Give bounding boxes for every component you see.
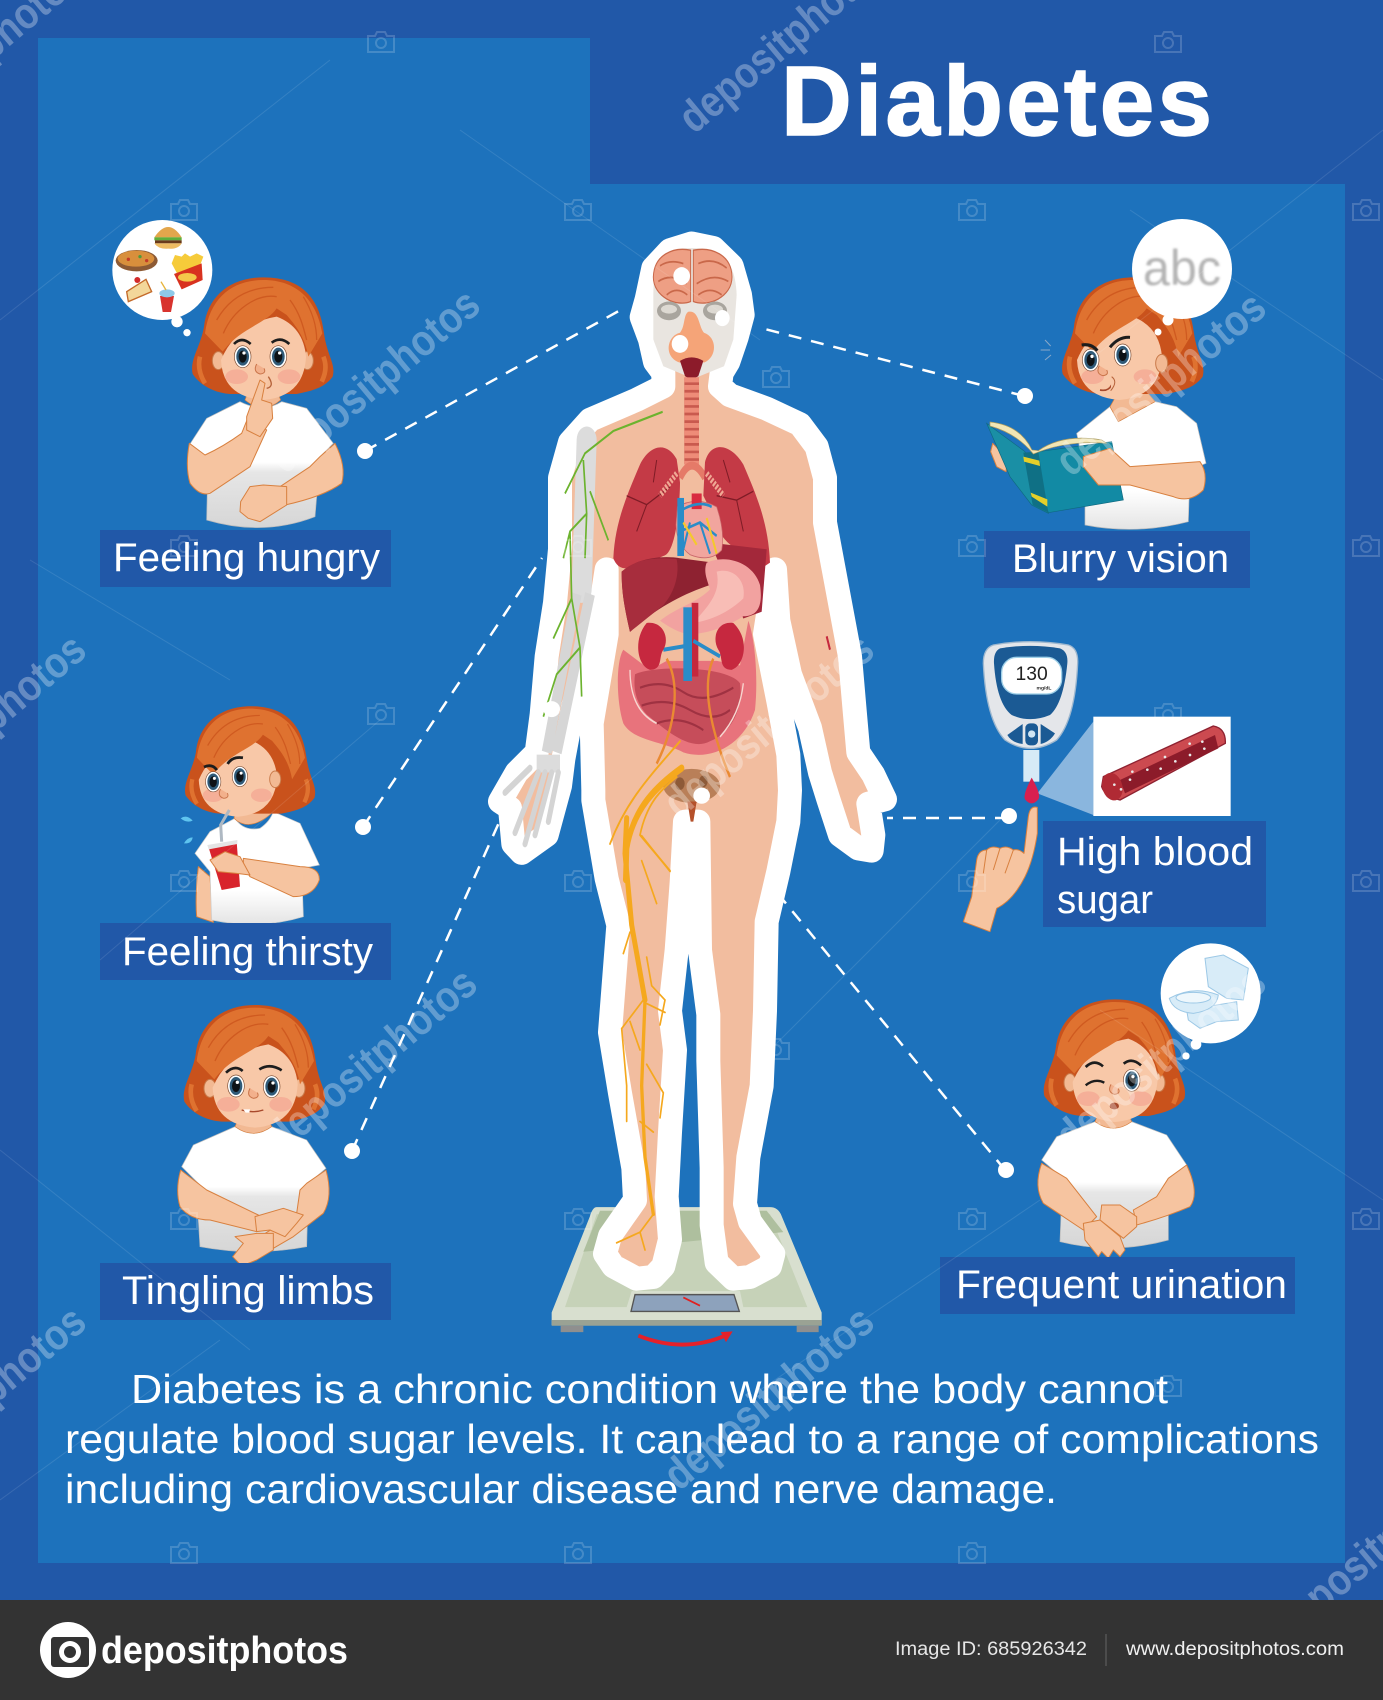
watermarks: depositphotos: [654, 1296, 883, 1500]
description paragraph: Diabetes is a chronic condition where the body cannot: [131, 1366, 1169, 1412]
blood drop: [1025, 778, 1039, 803]
footer logo: depositphotos: [101, 1630, 348, 1672]
label: blurry vision: [984, 531, 1250, 588]
vessel inset: [1093, 717, 1231, 816]
head: [1062, 277, 1203, 400]
label: high blood sugar: [1043, 821, 1266, 927]
title banner: [590, 0, 1383, 184]
label: feeling hungry: Feeling hungry: [113, 536, 380, 580]
description paragraph: regulate blood sugar levels. It can lead to a range of complications: [65, 1416, 1319, 1462]
watermarks: depositphotos: [654, 624, 883, 828]
glucose meter: mg/dL: [1037, 685, 1051, 691]
lower arm: [196, 867, 213, 922]
glucose meter: [983, 642, 1078, 748]
reading arm: [1083, 448, 1205, 499]
head: [1044, 999, 1185, 1122]
upper nerve: [610, 741, 682, 880]
head: [185, 706, 315, 817]
brain: [653, 249, 732, 303]
website: www.depositphotos.com: [1125, 1639, 1344, 1660]
label: feeling thirsty: [100, 923, 391, 980]
neck: [234, 800, 273, 824]
test strip: [1023, 750, 1039, 782]
watermarks: depositphotos: [260, 279, 489, 483]
cake: [127, 277, 152, 302]
body silhouette: [500, 243, 885, 1279]
thought bubble: toilet: [1161, 943, 1261, 1060]
glucose meter: 130: [1016, 664, 1048, 685]
head: [184, 1005, 325, 1128]
connector lines: [344, 307, 1033, 1178]
neck: [1110, 392, 1155, 422]
body anatomy figure on scale: [500, 243, 885, 1345]
liver and stomach: [622, 543, 767, 634]
arms and hands: [1038, 1163, 1194, 1258]
person: feeling thirsty: [181, 706, 319, 924]
arms and hands: [187, 417, 343, 522]
skull: [653, 248, 737, 379]
description paragraph: including cardiovascular disease and nerve damage.: [65, 1466, 1057, 1512]
heart: [676, 493, 723, 558]
small vessel mark: [827, 636, 830, 650]
label: tingling limbs: Tingling limbs: [122, 1269, 374, 1313]
label: frequent urination: Frequent urination: [956, 1263, 1287, 1307]
person: blurry vision: [987, 277, 1206, 529]
hand and arm: [210, 852, 319, 897]
bladder: [663, 769, 720, 822]
shirt: [182, 1127, 326, 1252]
thought bubble: blurred abc: abc: [1143, 240, 1221, 296]
cup and straw: [207, 810, 240, 890]
eye sockets: [657, 302, 727, 320]
ureters: [657, 659, 730, 777]
head: [192, 277, 333, 400]
label: high blood sugar: sugar: [1057, 878, 1153, 922]
bathroom scale: [552, 1207, 822, 1345]
person: feeling hungry: [187, 277, 343, 528]
stress marks: [1041, 340, 1051, 360]
label: tingling limbs: [100, 1263, 391, 1320]
label: blurry vision: Blurry vision: [1012, 537, 1229, 581]
thought bubble: blurred abc: [1132, 219, 1232, 336]
lower leg nerve: [617, 818, 670, 1250]
footer logo: [40, 1622, 348, 1678]
watermarks: depositphotos: [1046, 957, 1275, 1161]
glucose meter, finger and blood vessel: [963, 642, 1231, 932]
pizza: [116, 250, 158, 271]
lymph vessels: [543, 412, 663, 717]
watermarks: depositphotos: [257, 958, 486, 1162]
neck: [1095, 1110, 1132, 1128]
footer bar: [0, 1600, 1383, 1700]
water drops: [181, 817, 193, 843]
shirt: [195, 812, 319, 924]
intestines: [618, 621, 756, 755]
pricked finger hand: [963, 807, 1037, 932]
label: high blood sugar: High blood: [1057, 830, 1253, 874]
arm bones: [505, 440, 590, 844]
title banner: Diabetes: [781, 46, 1212, 156]
nose cavity: [669, 312, 714, 378]
aorta and kidneys: [638, 603, 744, 681]
image id: Image ID: 685926342: [895, 1639, 1087, 1660]
shirt: [1042, 1122, 1187, 1248]
book: [987, 422, 1123, 513]
person: tingling limbs: [178, 1005, 329, 1266]
magnifier beam: [1037, 722, 1093, 815]
thought bubble: junk food: [112, 220, 212, 336]
lungs: [613, 447, 770, 572]
neck: [235, 1115, 272, 1133]
person: frequent urination: [1038, 999, 1194, 1258]
arms and hands: [178, 1170, 329, 1266]
toilet: [1169, 955, 1248, 1028]
small hand behind book: [991, 443, 1007, 472]
shirt: [1077, 402, 1206, 529]
trachea: [680, 377, 705, 478]
watermarks: depositphotos: [1046, 282, 1275, 486]
white points on body: [543, 267, 730, 804]
neck and shirt: [189, 387, 333, 528]
label: feeling thirsty: Feeling thirsty: [122, 930, 373, 974]
soda cup: [159, 282, 175, 312]
fries: [172, 253, 203, 289]
burger: [154, 227, 182, 249]
description paragraph: [65, 1366, 1319, 1512]
